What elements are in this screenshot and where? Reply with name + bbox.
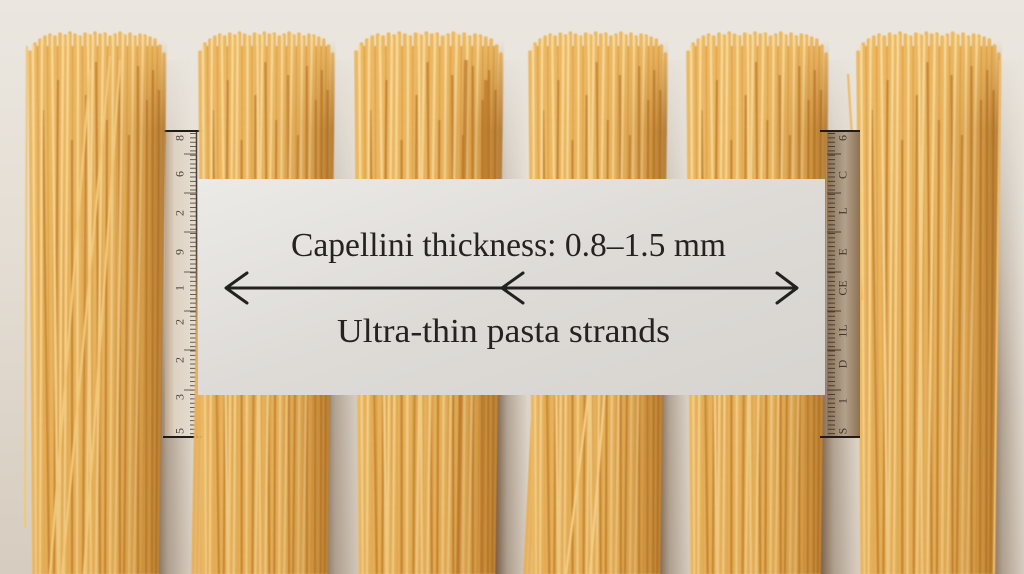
title: capellini thickness: Capellini thickness: 0.8–1.5 mm xyxy=(291,227,726,264)
ruler: right: 1L xyxy=(836,324,850,338)
pasta bundle 4 xyxy=(525,33,668,574)
label card xyxy=(198,179,825,395)
pasta bundle 5 xyxy=(688,33,829,574)
ruler: left: 6 xyxy=(172,171,186,177)
pasta bundle 2 xyxy=(193,33,336,574)
ruler: left: 1 xyxy=(172,285,186,291)
ruler: right: C xyxy=(836,171,850,179)
pasta bundle 3 xyxy=(356,33,504,574)
ruler: left: 2 xyxy=(172,210,186,216)
ruler: right: 6 xyxy=(836,135,850,141)
ruler: left: 3 xyxy=(172,394,186,400)
ruler: left: 2 xyxy=(172,319,186,325)
bundle shadows xyxy=(152,60,1024,574)
ruler: right: S xyxy=(836,428,850,434)
ruler: right xyxy=(820,131,860,437)
ruler: right: L xyxy=(836,207,850,215)
ruler: right: 1 xyxy=(836,398,850,404)
ruler: left xyxy=(163,131,204,437)
subtitle: ultra-thin pasta strands: Ultra-thin pasta strands xyxy=(337,313,670,350)
ruler: left: 9 xyxy=(172,249,186,255)
ruler: left: 8 xyxy=(172,135,186,141)
arrow: double-headed measurement xyxy=(226,273,797,303)
pasta bundle 6 xyxy=(848,33,1002,574)
ruler: left: 5 xyxy=(172,428,186,434)
ruler: left: 2 xyxy=(172,357,186,363)
ruler: right: CE xyxy=(836,280,850,296)
pasta bundle 1 xyxy=(25,33,167,574)
ruler: right: E xyxy=(836,248,850,256)
ruler: right: D xyxy=(836,359,850,368)
